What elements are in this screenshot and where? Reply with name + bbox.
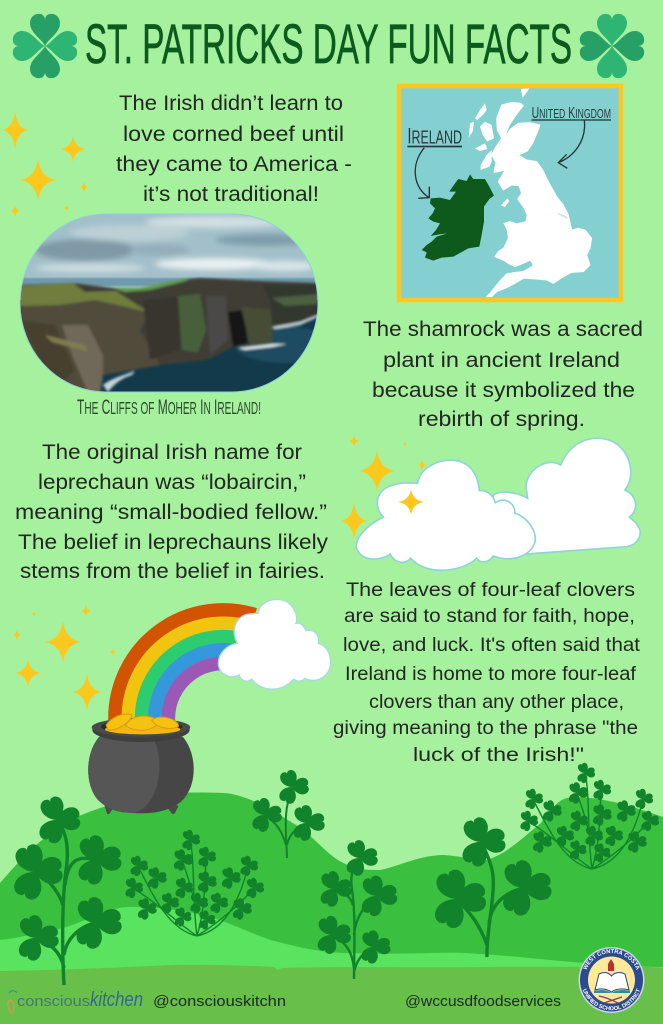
handle: WCCUSD: @wccusdfoodservices — [405, 994, 561, 1010]
icon: left four-leaf shamrock — [13, 14, 77, 78]
text: shamrock fact: The shamrock was a sacred — [363, 318, 643, 341]
arrow: United Kingdom — [558, 120, 585, 168]
logo: conscious kitchen — [8, 989, 143, 1013]
text: shamrock fact — [363, 318, 643, 431]
text: leprechaun fact: stems from the belief in fairies. — [20, 560, 325, 583]
text: corned beef fact: it’s not traditional! — [143, 183, 319, 206]
map: Ireland — [422, 174, 494, 261]
panel: map of Ireland and UK — [399, 86, 621, 300]
clover plant: center — [316, 839, 398, 979]
text: four-leaf clover fact: Ireland is home to more four-leaf — [345, 663, 637, 685]
text: four-leaf clover fact: clovers than any other place, — [369, 691, 624, 713]
text: four-leaf clover fact: luck of the Irish!" — [413, 744, 584, 766]
text: four-leaf clover fact: giving meaning to the phrase "the — [333, 717, 638, 739]
handle: conscious kitchen: @consciouskitchn — [153, 994, 286, 1010]
logo: school district seal: WEST CONTRA COSTA — [582, 949, 640, 970]
text: leprechaun fact: meaning “small-bodied fellow.” — [15, 501, 327, 524]
photo: Cliffs of Moher — [20, 214, 335, 395]
text: four-leaf clover fact — [333, 579, 641, 766]
rainbow — [115, 610, 256, 722]
cloud: back — [490, 438, 640, 554]
sparkles: behind clouds — [341, 435, 426, 540]
text: shamrock fact: rebirth of spring. — [418, 408, 585, 431]
clover bush: right — [519, 762, 659, 869]
arrow: Ireland — [415, 148, 429, 198]
text: corned beef fact: love corned beef until — [123, 123, 344, 146]
label: Ireland: IRELAND — [407, 123, 462, 148]
text: leprechaun fact: leprechaun was “lobaircin,” — [38, 471, 306, 494]
text: four-leaf clover fact: love, and luck. It's often said that — [343, 634, 641, 656]
icon: right four-leaf shamrock — [580, 14, 644, 78]
icon: pot of gold — [88, 714, 194, 813]
text: shamrock fact: plant in ancient Ireland — [383, 349, 620, 372]
map: United Kingdom — [487, 102, 592, 297]
text: corned beef fact: The Irish didn’t learn to — [119, 92, 343, 115]
cloud: front — [356, 460, 535, 570]
logo: conscious kitchen: kitchen — [90, 989, 143, 1011]
logo: school district seal — [578, 947, 644, 1013]
text: leprechaun fact: The original Irish name for — [42, 441, 302, 464]
text: four-leaf clover fact: are said to stand for faith, hope, — [344, 605, 635, 627]
label: Ireland — [407, 123, 462, 148]
text: leprechaun fact: The belief in leprechauns likely — [18, 531, 329, 554]
text: corned beef fact — [116, 92, 352, 206]
clouds — [356, 438, 640, 570]
text: shamrock fact: because it symbolized the — [372, 379, 635, 402]
sparkle: on cloud — [398, 489, 424, 515]
sparkles: rainbow — [13, 605, 116, 711]
caption: cliffs: THE CLIFFS OF MOHER IN IRELAND! — [77, 396, 261, 419]
clover bush: left — [124, 829, 264, 936]
map frame — [399, 86, 621, 300]
hills — [0, 793, 663, 1024]
cloud: rainbow end — [218, 599, 331, 689]
clover plant: small top — [250, 769, 325, 858]
text: leprechaun fact — [15, 441, 329, 583]
label: United Kingdom: UNITED KINGDOM — [532, 105, 611, 122]
text: four-leaf clover fact: The leaves of four-leaf clovers — [346, 579, 635, 601]
logo: school district seal: UNIFIED SCHOOL DISTRICT — [583, 988, 640, 1010]
sparkles: top left — [2, 111, 88, 217]
clover plant: large right — [432, 815, 552, 957]
text: corned beef fact: they came to America - — [116, 153, 352, 176]
clover plant: large left — [11, 795, 122, 985]
logo: conscious kitchen: conscious — [17, 993, 90, 1010]
icon: carrot — [8, 991, 17, 1013]
